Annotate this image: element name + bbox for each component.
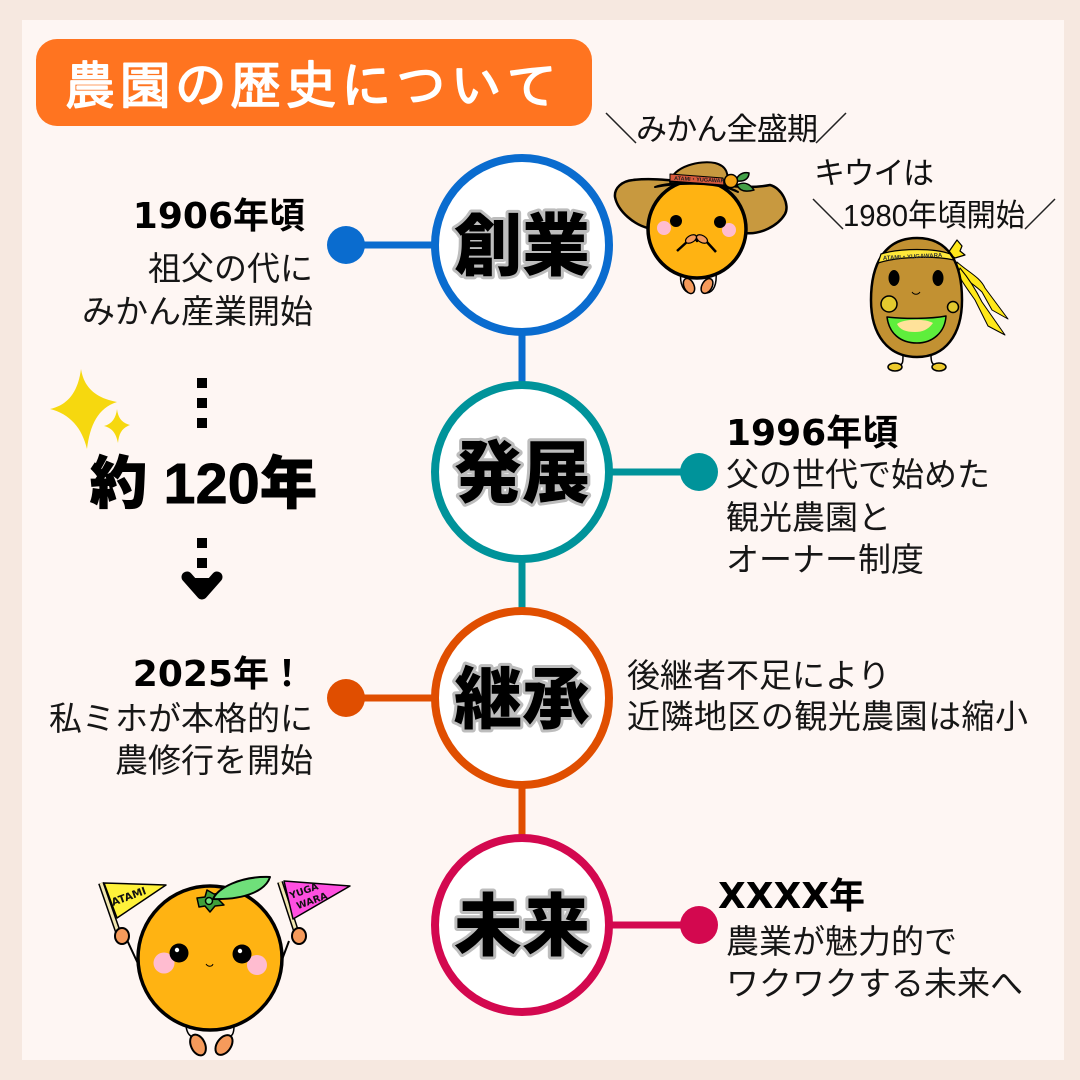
text block: future: XXXX年 (718, 876, 865, 917)
node: 継承 (327, 611, 609, 785)
text block: successor shortage: 後継者不足により (627, 657, 890, 694)
flag label: ATAMI: ATAMI (110, 885, 148, 909)
flag label: YUGA WARA: YUGA (288, 881, 320, 902)
flag label: YUGA WARA: WARA (295, 891, 330, 912)
node: 創業 (327, 158, 609, 332)
hat band label: ATAMI・YUGAWARA (674, 176, 729, 185)
mascot: mikan with straw hat (615, 162, 787, 295)
dotted line upper (197, 378, 207, 428)
mascot: mikan with flags (101, 877, 350, 1058)
text block: 1996: オーナー制度 (726, 541, 924, 578)
text block: 2025: 私ミホが本格的に (49, 700, 313, 737)
timeline connector (518, 330, 526, 840)
text block: 2025: 2025年！ (133, 654, 305, 695)
node: 発展 (435, 385, 718, 559)
duration label: 約 120年 (90, 452, 317, 516)
caption: kiwi: キウイは (814, 156, 934, 191)
node: 創業: 創業 (454, 209, 590, 285)
text block: future (718, 876, 1023, 1002)
text block: successor shortage: 近隣地区の観光農園は縮小 (627, 698, 1028, 735)
arrow: dotted down (187, 538, 217, 597)
caption: kiwi (813, 156, 1055, 233)
text block: 2025: 農修行を開始 (115, 742, 313, 779)
node: 未来: 未来 (454, 889, 590, 965)
text block: successor shortage (627, 657, 1028, 735)
mascot: kiwi with headband (871, 238, 1008, 371)
text block: 2025 (49, 654, 313, 779)
text block: 1906: 祖父の代に (148, 250, 313, 287)
title banner (36, 39, 592, 126)
caption: mikan peak: みかん全盛期 (636, 112, 818, 147)
text block: 1906: 1906年頃 (133, 196, 305, 237)
headband label: ATAMI・YUGAWARA (883, 253, 943, 262)
text block: 1996: 1996年頃 (726, 413, 898, 454)
icon: sparkle (50, 369, 130, 449)
node: 継承: 継承 (454, 662, 590, 738)
node: 発展: 発展 (454, 436, 590, 512)
text block: 1996 (726, 413, 990, 578)
text block: 1906 (82, 196, 313, 330)
text block: 1906: みかん産業開始 (82, 293, 313, 330)
text block: future: 農業が魅力的で (726, 923, 957, 960)
text block: 1996: 父の世代で始めた (726, 456, 990, 493)
title: 農園の歴史について (64, 59, 558, 111)
text block: future: ワクワクする未来へ (726, 965, 1023, 1002)
text block: 1996: 観光農園と (726, 499, 891, 536)
node: 未来 (435, 838, 718, 1012)
caption: kiwi: 1980年頃開始 (843, 198, 1025, 233)
